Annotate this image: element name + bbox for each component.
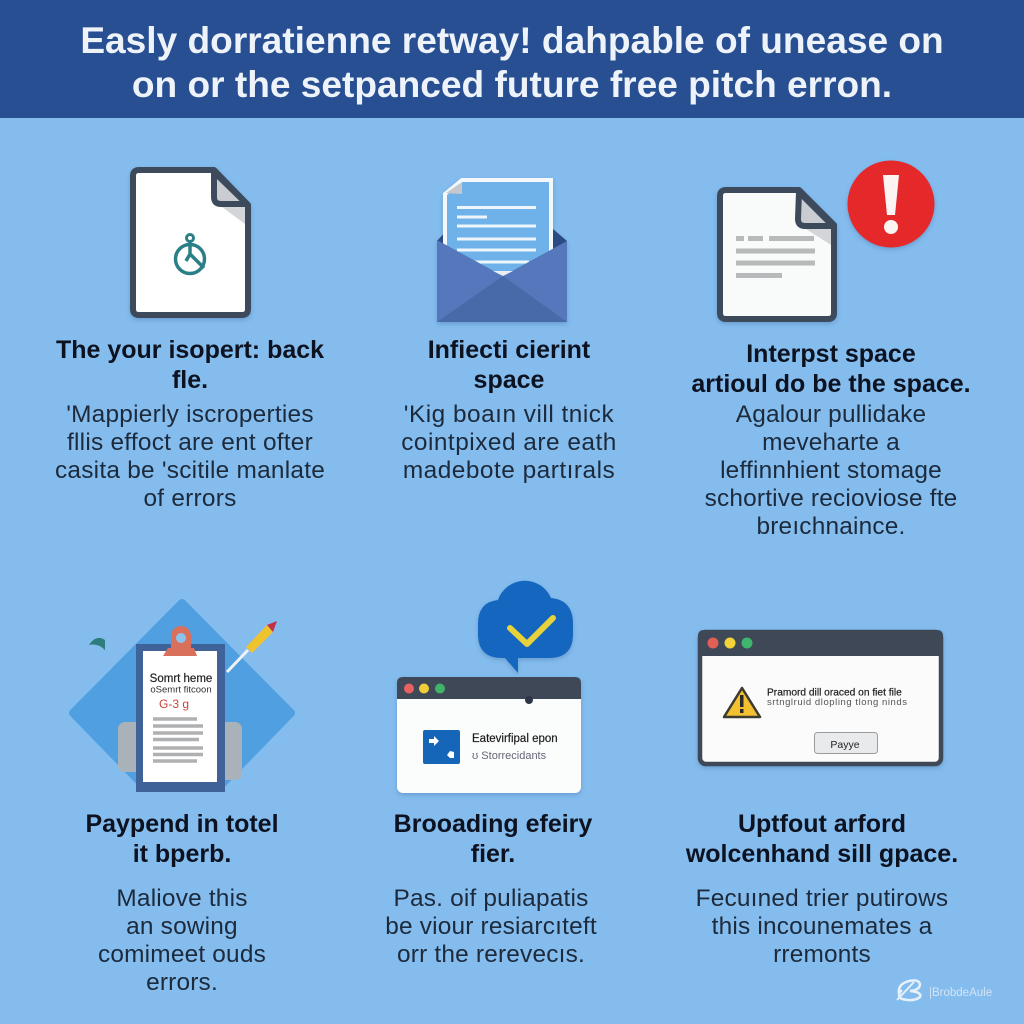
heading [428,336,590,394]
text block: Fecuıned trier putirows [696,885,948,912]
text block [98,885,266,996]
icon: brand logo [897,980,992,1000]
text block: madebote partırals [403,457,615,484]
text block: schortive recioviose fte [705,485,957,512]
panel: top left text [55,336,325,512]
panel: bottom right text [686,810,958,968]
text block: leffinnhient stomage [720,457,942,484]
icon: browser warning dialog: Payye [830,739,860,751]
text block [385,885,597,968]
icon: clipboard on diamond: G-3 g [159,697,189,711]
heading: Interpst space [746,340,916,368]
icon: document with alert [720,160,934,319]
heading: artioul do be the space. [691,370,971,398]
heading: it bperb. [133,840,231,868]
text block: Maliove this [116,885,248,912]
title: Easly dorratienne retway! dahpable of unease on [80,19,944,61]
text block: 'Kig boaın vill tnick [404,401,614,428]
text block [696,885,948,968]
icon: brand logo: |BrobdeAule [929,987,992,999]
icon: browser window with cloud check: Eatevirfipal epon [472,733,558,745]
text block [705,401,957,540]
text block: of errors [143,485,237,512]
heading [56,336,324,394]
title [80,19,944,104]
text block: cointpixed are eath [401,429,617,456]
icon: browser window with cloud check [397,581,581,793]
text block: breıchnaince. [756,513,906,540]
panel: top middle text [401,336,617,484]
heading: wolcenhand sill gpace. [686,840,958,868]
heading: fle. [172,366,208,394]
text block: be viour resiarcıteft [385,913,597,940]
icon: clipboard on diamond: oSemrt fitcoon [150,684,212,696]
panel: bottom left text [85,810,279,996]
text block: casita be 'scitile manlate [55,457,325,484]
heading: Brooading efeiry [394,810,592,838]
heading: Infiecti cierint [428,336,590,364]
icon: browser window with cloud check: ʊ Storrecidants [472,750,547,762]
text block: an sowing [126,913,238,940]
heading: fier. [471,840,515,868]
icon: clipboard on diamond: Somrt heme [150,673,212,685]
heading: Uptfout arford [738,810,906,838]
heading [85,810,279,868]
text block: 'Mappierly iscroperties [66,401,314,428]
text block: this incounemates a [712,913,932,940]
icon: browser warning dialog: srtnglruid dlopling tlong ninds [767,697,907,708]
text block [401,401,617,484]
text block: Agalour pullidake [736,401,926,428]
text block: fllis effoct are ent ofter [67,429,313,456]
text block: comimeet ouds [98,941,266,968]
header banner [0,0,1024,118]
panel: bottom middle text [385,810,597,968]
text block: errors. [146,969,218,996]
heading: space [474,366,544,394]
text block: rremonts [773,941,871,968]
heading [394,810,592,868]
text block: orr the rerevecıs. [397,941,585,968]
text block [55,401,325,512]
icon: clipboard on diamond [73,603,291,792]
heading [686,810,958,868]
icon: browser warning dialog: Pramord dill oraced on fiet file [767,688,902,698]
heading: Paypend in totel [85,810,279,838]
icon: browser warning dialog [698,630,943,764]
text block: meveharte a [762,429,900,456]
heading: The your isopert: back [56,336,324,364]
icon: envelope with letter [437,180,567,322]
title: on or the setpanced future free pitch erron. [132,62,892,104]
icon: document with symbol [133,170,248,315]
text block: Pas. oif puliapatis [394,885,588,912]
panel: top right text [691,340,971,540]
heading [691,340,971,398]
